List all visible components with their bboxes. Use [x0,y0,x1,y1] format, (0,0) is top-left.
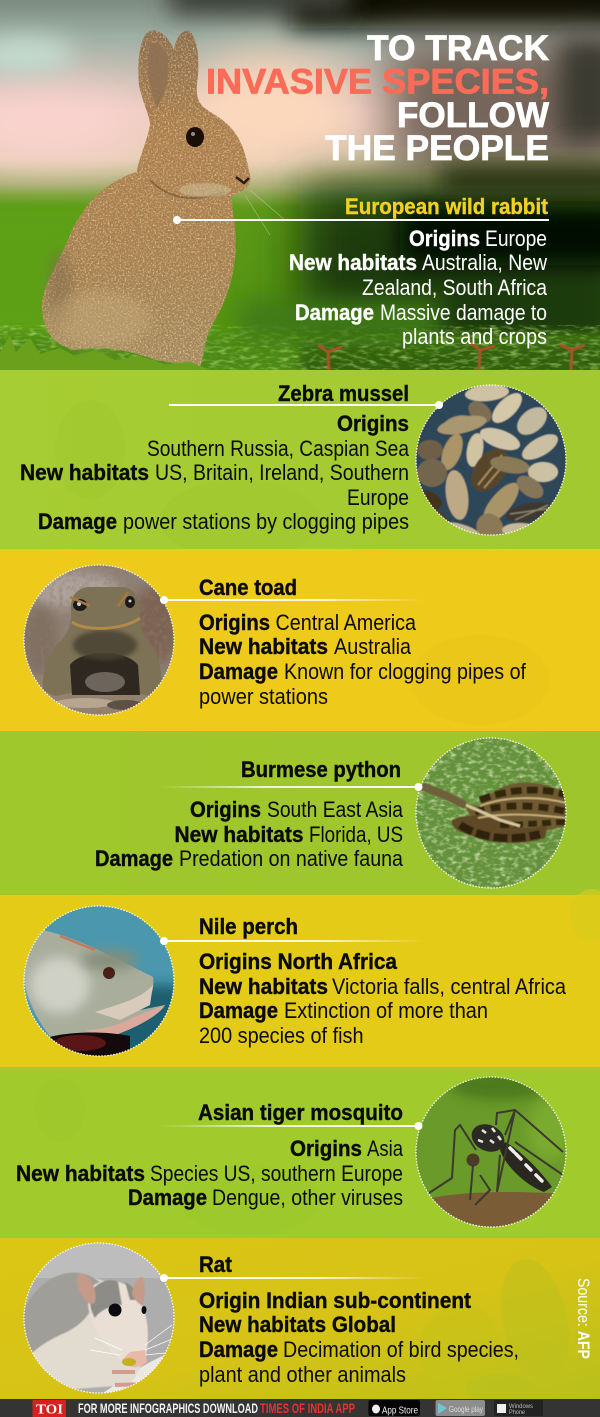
rat text: Damage [199,1337,278,1362]
rat photo [22,1243,180,1400]
hero background photo [0,0,600,395]
mosquito photo [416,1077,566,1227]
Google Play badge: Google play [449,1404,484,1414]
Asian tiger mosquito text: Damage [128,1185,207,1210]
zebra mussel text: Europe [347,485,409,510]
Burmese python text: Burmese python [241,757,401,782]
text block: European wild rabbit: Australia, New [422,250,548,275]
panel: Asian tiger mosquito [17,1076,567,1228]
Google Play badge [436,1400,485,1416]
rat text: Decimation of bird species, [283,1337,519,1362]
zebra mussel text: US, Britain, Ireland, Southern [155,460,409,485]
zebra mussel text: Damage [38,509,117,534]
Burmese python text [95,757,422,871]
panel: Burmese python [96,737,567,889]
Asian tiger mosquito text: Species US, southern Europe [150,1161,403,1186]
python photo [416,738,570,888]
title [206,29,549,168]
text block: European wild rabbit [173,194,549,349]
Windows Phone badge [494,1400,543,1416]
zebra mussel text: Zebra mussel [278,381,409,406]
cane toad text: Cane toad [199,575,297,600]
TOI logo [32,1400,66,1417]
cane toad text: Damage [199,659,278,684]
rat text: New habitats Global [199,1312,396,1337]
cane toad text: power stations [199,684,328,709]
text block: European wild rabbit: European wild rabbit [345,194,548,219]
mussel photo [415,383,566,547]
Burmese python text: New habitats [174,822,304,847]
Asian tiger mosquito text [16,1100,422,1210]
Burmese python text: Florida, US [309,822,403,847]
text block: European wild rabbit: Massive damage to [380,300,547,325]
toad photo [20,565,180,720]
Burmese python text: South East Asia [267,797,403,822]
panel: rat [0,1238,600,1402]
zebra mussel text: New habitats [20,460,149,485]
rabbit [42,30,285,368]
title: TO TRACK [367,29,549,68]
zebra mussel text [20,381,443,534]
title: THE PEOPLE [325,129,549,168]
title: INVASIVE SPECIES, [206,62,549,102]
Asian tiger mosquito text: Dengue, other viruses [212,1185,403,1210]
rat text: Origin Indian sub-continent [199,1288,471,1313]
footer message: TIMES OF INDIA APP [260,1400,355,1416]
Nile perch text [160,914,566,1048]
red flowers in grass [316,342,586,370]
panel: zebra mussel [21,384,567,536]
footer message: FOR MORE INFOGRAPHICS DOWNLOAD [78,1400,258,1416]
Nile perch text: Victoria falls, central Africa [332,974,566,999]
Windows Phone badge: Phone [509,1410,526,1416]
text block: European wild rabbit: New habitats [289,250,417,275]
App Store badge: App Store [382,1406,418,1416]
Nile perch text: 200 species of fish [199,1023,364,1048]
Nile perch text: Nile perch [199,914,298,939]
Nile perch text: New habitats [199,974,328,999]
text block: European wild rabbit: Europe [485,226,547,251]
rat text [160,1252,519,1387]
perch photo [20,906,180,1060]
Asian tiger mosquito text: Asian tiger mosquito [198,1100,403,1125]
panel: cane toad [0,549,600,731]
Burmese python text: Damage [95,846,173,871]
cane toad text: Origins [199,610,270,635]
cane toad text [160,575,527,709]
Nile perch text: Origins North Africa [199,949,397,974]
Burmese python text: Predation on native fauna [179,846,403,871]
Asian tiger mosquito text: New habitats [16,1161,145,1186]
Nile perch text: Extinction of more than [284,998,488,1023]
Windows Phone badge: Windows [509,1404,533,1410]
rat text: plant and other animals [199,1362,406,1387]
text block: European wild rabbit: plants and crops [402,324,547,349]
text block: European wild rabbit: Damage [295,300,374,325]
Nile perch text: Damage [199,998,278,1023]
rat text: Rat [199,1252,232,1277]
text block: European wild rabbit: Zealand, South Africa [362,275,547,300]
source credit: Source: AFP [574,1278,593,1359]
cane toad text: Central America [276,610,416,635]
panel: hero rabbit [0,0,600,395]
zebra mussel text: Southern Russia, Caspian Sea [147,436,409,461]
cane toad text: Australia [334,634,411,659]
Asian tiger mosquito text: Origins [290,1136,362,1161]
cane toad text: New habitats [199,634,328,659]
App Store badge [368,1400,420,1416]
Burmese python text: Origins [190,797,261,822]
title: FOLLOW [397,96,549,135]
grass overlay at rabbit feet [0,335,210,370]
zebra mussel text: power stations by clogging pipes [123,509,409,534]
footer bar [0,1399,600,1417]
Asian tiger mosquito text: Asia [367,1136,403,1161]
cane toad text: Known for clogging pipes of [284,659,527,684]
zebra mussel text: Origins [337,411,409,436]
panel: Nile perch [0,889,600,1067]
text block: European wild rabbit: Origins [409,226,480,251]
